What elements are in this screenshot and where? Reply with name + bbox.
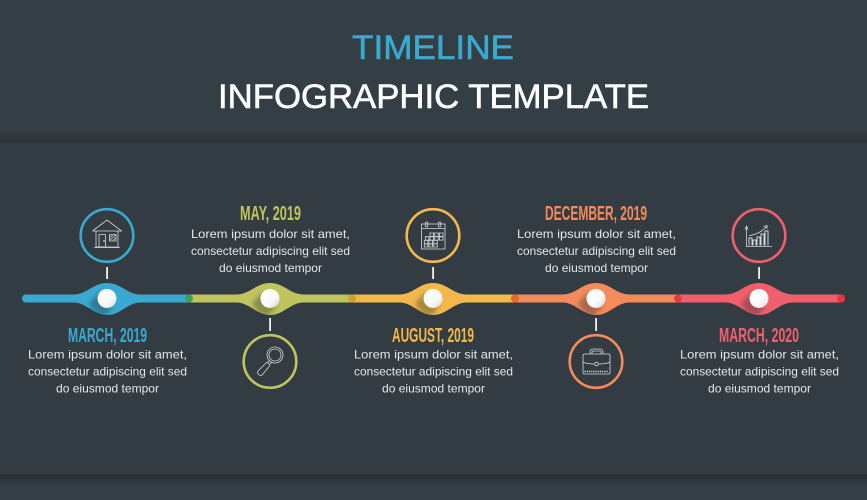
date: DECEMBER, 2019 [545, 203, 647, 225]
step: August 2019 [354, 325, 513, 396]
description [680, 348, 839, 396]
icon circle: magnifier [244, 335, 296, 388]
description: Lorem ipsum dolor sit amet, [680, 348, 839, 362]
connectors [106, 267, 760, 331]
description: consectetur adipiscing elit sed [680, 364, 839, 378]
description [517, 227, 676, 275]
description: do eiusmod tempor [545, 261, 648, 275]
step: March 2020 [680, 325, 839, 396]
step: May 2019 [191, 203, 350, 275]
description: Lorem ipsum dolor sit amet, [191, 227, 350, 241]
description: Lorem ipsum dolor sit amet, [354, 348, 513, 362]
description: Lorem ipsum dolor sit amet, [28, 348, 187, 362]
title line 1: TIMELINE [352, 29, 514, 67]
segment: green [189, 283, 355, 315]
segment: red [678, 283, 845, 315]
icon: briefcase [583, 349, 610, 374]
description [28, 348, 187, 396]
panel shadow edges [0, 131, 867, 486]
step: December 2019 [517, 203, 676, 275]
icon circle: calendar [407, 209, 459, 262]
timeline bar [22, 283, 845, 315]
date: MARCH, 2019 [68, 325, 147, 347]
step: March 2019 [28, 325, 187, 396]
description: Lorem ipsum dolor sit amet, [517, 227, 676, 241]
icon circle: house [81, 209, 133, 262]
icon: calendar [422, 222, 445, 249]
description: do eiusmod tempor [219, 261, 322, 275]
segment: orange [515, 283, 681, 315]
joint dots [185, 294, 845, 302]
description: consectetur adipiscing elit sed [354, 364, 513, 378]
date: MAY, 2019 [240, 203, 301, 225]
segment: blue [22, 283, 192, 315]
description: consectetur adipiscing elit sed [28, 364, 187, 378]
icon circle: briefcase [570, 335, 622, 388]
node shadows [89, 292, 765, 316]
description: consectetur adipiscing elit sed [191, 244, 350, 258]
segment: yellow [352, 283, 518, 315]
description [354, 348, 513, 396]
description [191, 227, 350, 275]
description: consectetur adipiscing elit sed [517, 244, 676, 258]
icon: magnifier [258, 347, 283, 375]
date: AUGUST, 2019 [392, 325, 474, 347]
title line 2: INFOGRAPHIC TEMPLATE [218, 78, 649, 116]
date: MARCH, 2020 [719, 325, 799, 347]
title [218, 29, 649, 116]
icon: chart [745, 226, 772, 246]
icon: house [92, 220, 122, 248]
description: do eiusmod tempor [708, 382, 811, 396]
description: do eiusmod tempor [382, 382, 485, 396]
icon circle: chart [733, 209, 785, 262]
knobs [98, 289, 768, 308]
description: do eiusmod tempor [56, 382, 159, 396]
